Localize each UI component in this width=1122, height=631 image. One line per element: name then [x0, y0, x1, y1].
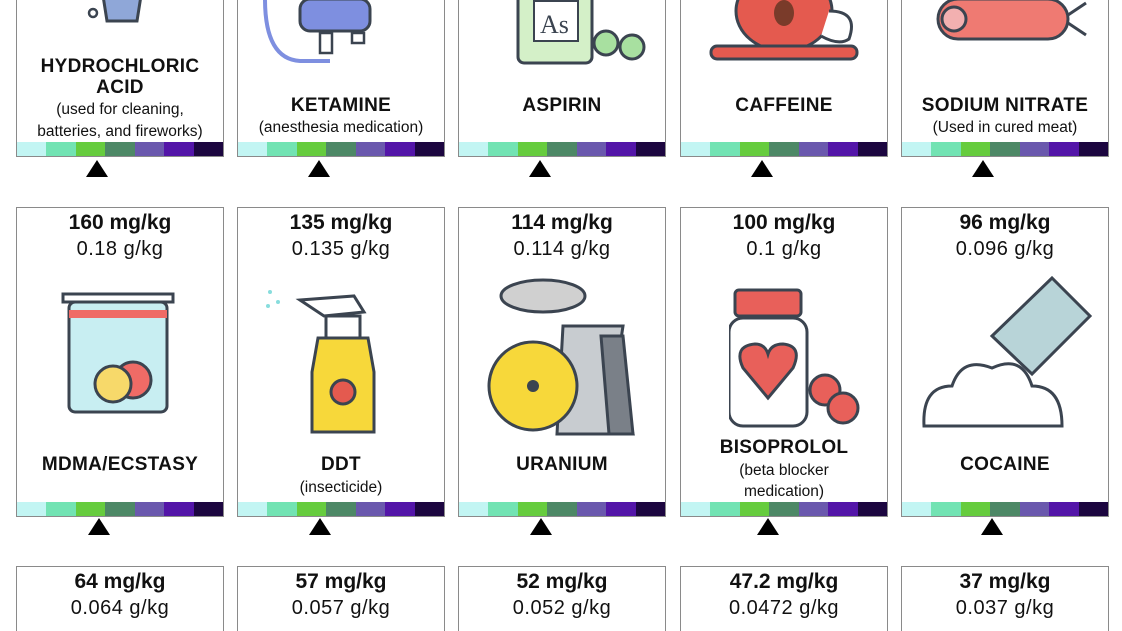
value — [69, 211, 171, 260]
icon: pill box — [516, 0, 646, 64]
panel: ddt — [237, 207, 445, 517]
marker — [981, 518, 1003, 535]
subtitle: medication) — [744, 483, 824, 500]
value — [511, 211, 613, 260]
value: 0.052 g/kg — [513, 597, 611, 619]
value — [733, 211, 835, 260]
subtitle: (beta blocker — [739, 462, 829, 479]
value: 0.0472 g/kg — [729, 597, 839, 619]
value: 0.037 g/kg — [956, 597, 1054, 619]
icon: pill box: As — [540, 10, 569, 39]
icon: nuclear plant — [488, 278, 635, 436]
marker — [88, 518, 110, 535]
value: 0.135 g/kg — [292, 238, 390, 260]
value — [290, 211, 392, 260]
value — [513, 570, 611, 619]
value — [71, 570, 169, 619]
marker — [308, 160, 330, 177]
value: 114 mg/kg — [511, 211, 613, 234]
value — [956, 570, 1054, 619]
value: 160 mg/kg — [69, 211, 171, 234]
label: ACID — [96, 77, 144, 98]
label: URANIUM — [516, 454, 608, 475]
value: 57 mg/kg — [295, 570, 387, 593]
label: DDT — [321, 454, 361, 475]
panel: mdma — [16, 207, 224, 517]
label: KETAMINE — [291, 95, 391, 116]
marker — [530, 518, 552, 535]
label: CAFFEINE — [735, 95, 833, 116]
marker — [309, 518, 331, 535]
label: ASPIRIN — [522, 95, 602, 116]
value: 0.057 g/kg — [292, 597, 390, 619]
subtitle: (insecticide) — [300, 479, 382, 496]
subtitle: batteries, and fireworks) — [37, 123, 203, 140]
marker — [529, 160, 551, 177]
panel: row3 col5 — [901, 566, 1109, 631]
subtitle: (Used in cured meat) — [933, 119, 1077, 136]
label: HYDROCHLORIC — [41, 56, 199, 77]
value: 64 mg/kg — [74, 570, 166, 593]
icon: baggie — [62, 292, 174, 414]
value: 100 mg/kg — [733, 211, 835, 234]
label: COCAINE — [960, 454, 1050, 475]
subtitle — [739, 462, 829, 500]
icon: coffee cup — [710, 0, 858, 60]
label: SODIUM NITRATE — [922, 95, 1088, 116]
icon: spray bottle — [266, 290, 376, 434]
value: 96 mg/kg — [959, 211, 1051, 234]
marker — [86, 160, 108, 177]
marker — [757, 518, 779, 535]
icon: iv bag — [263, 0, 372, 63]
value: 52 mg/kg — [516, 570, 608, 593]
value — [729, 570, 839, 619]
subtitle: (anesthesia medication) — [259, 119, 423, 136]
panel: row3 col3 — [458, 566, 666, 631]
panel: row3 col1 — [16, 566, 224, 631]
panel: uranium — [458, 207, 666, 517]
value: 47.2 mg/kg — [730, 570, 838, 593]
subtitle — [37, 101, 203, 140]
panel: aspirin — [458, 0, 666, 157]
panel: hydrochloric acid — [16, 0, 224, 157]
marker — [751, 160, 773, 177]
label: MDMA/ECSTASY — [42, 454, 198, 475]
panel: ketamine — [237, 0, 445, 157]
value — [956, 211, 1054, 260]
icon: sausage — [936, 0, 1087, 40]
label: BISOPROLOL — [720, 437, 848, 458]
panel: caffeine — [680, 0, 888, 157]
value: 135 mg/kg — [290, 211, 392, 234]
subtitle: (used for cleaning, — [56, 101, 184, 118]
value — [292, 570, 390, 619]
panel: bisoprolol — [680, 207, 888, 517]
panel: cocaine — [901, 207, 1109, 517]
value: 0.1 g/kg — [746, 238, 822, 260]
icon: pill bottle heart — [729, 288, 860, 428]
panel: row3 col2 — [237, 566, 445, 631]
marker — [972, 160, 994, 177]
value: 0.064 g/kg — [71, 597, 169, 619]
value: 37 mg/kg — [959, 570, 1051, 593]
icon: flask — [88, 0, 142, 22]
value: 0.096 g/kg — [956, 238, 1054, 260]
value: 0.18 g/kg — [77, 238, 163, 260]
value: 0.114 g/kg — [514, 238, 610, 260]
icon: razor and powder — [922, 276, 1092, 428]
panel: sodium nitrate — [901, 0, 1109, 157]
label — [41, 56, 199, 98]
panel: row3 col4 — [680, 566, 888, 631]
